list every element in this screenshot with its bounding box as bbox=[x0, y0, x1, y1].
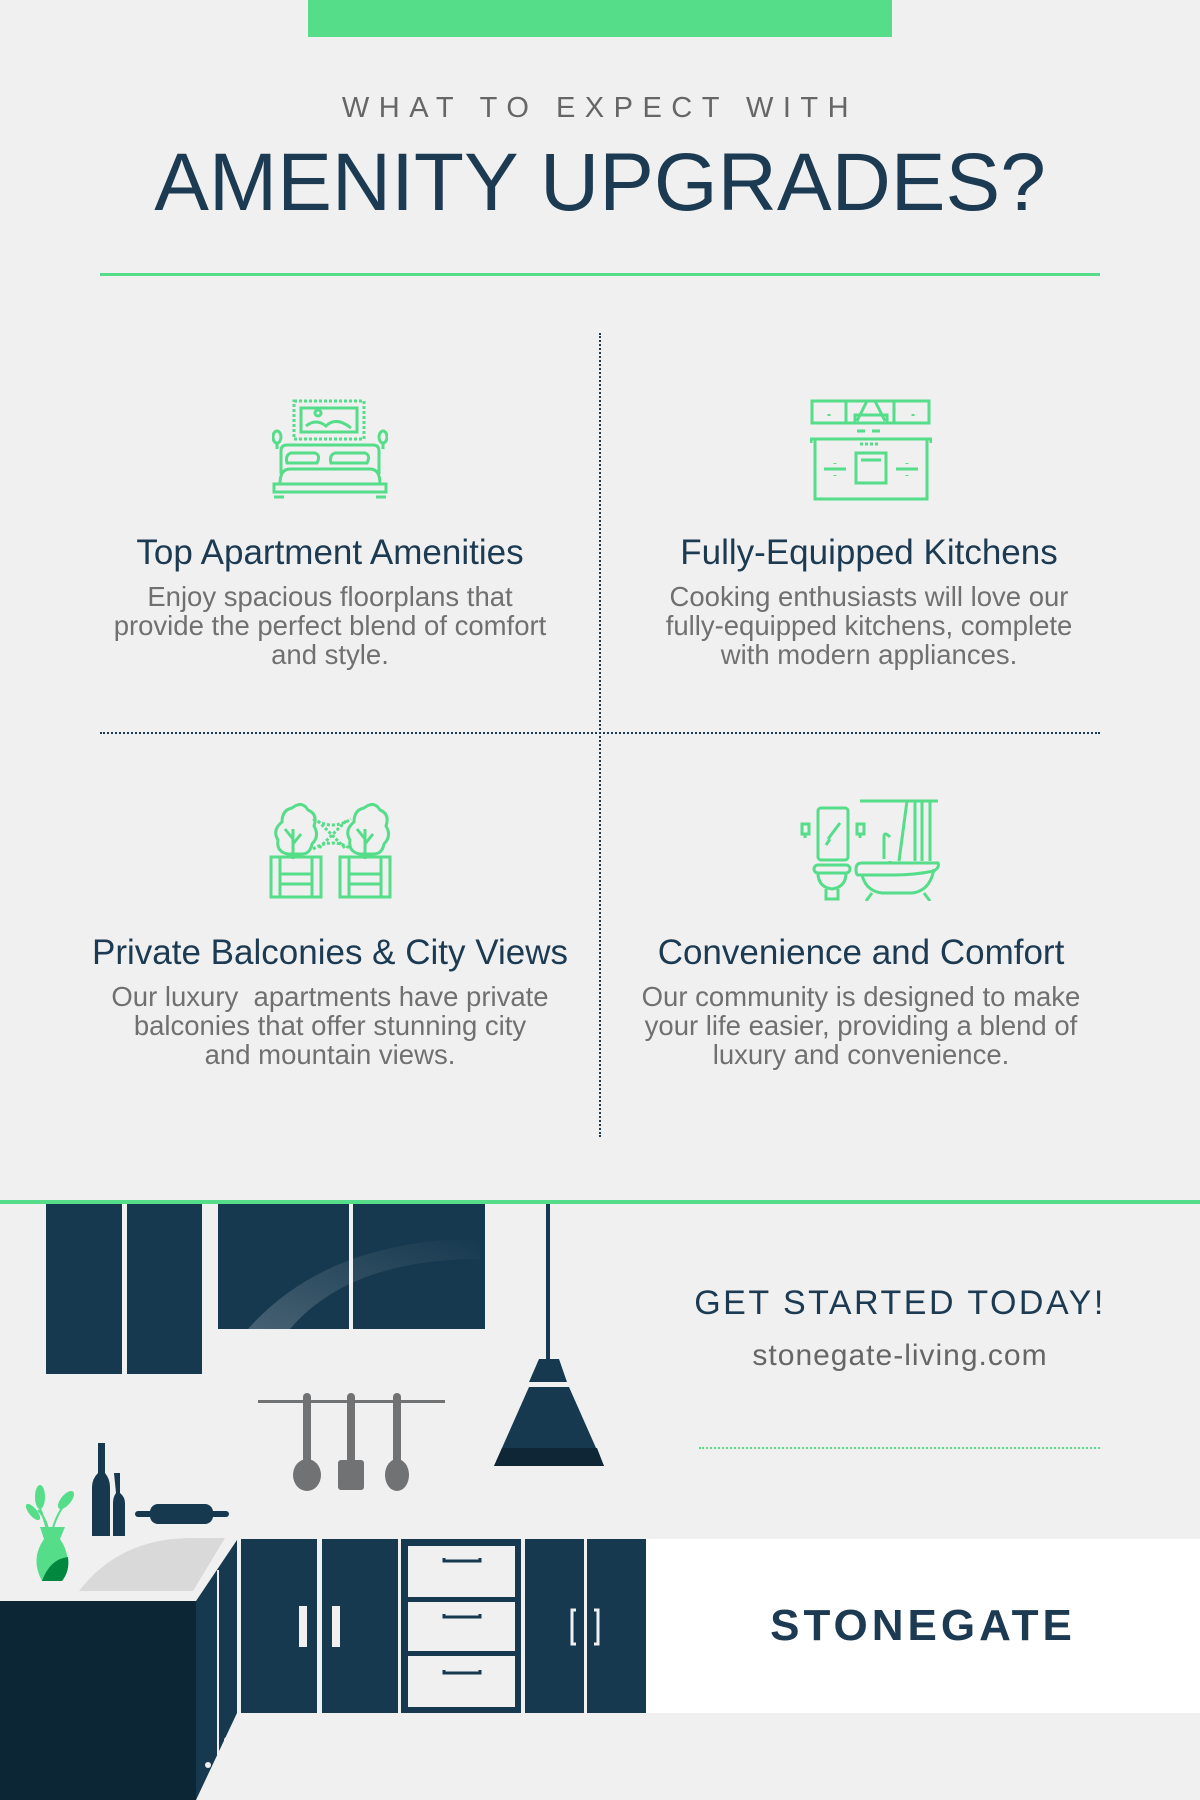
vase plant bbox=[24, 1485, 77, 1581]
window bbox=[218, 1204, 485, 1329]
text bbox=[642, 981, 1080, 1070]
rolling pin bbox=[135, 1504, 229, 1524]
heading: Private Balconies & City Views bbox=[92, 933, 568, 972]
text: Our community is designed to make bbox=[642, 981, 1080, 1012]
icon: bathroom bbox=[800, 800, 940, 901]
green separator line bbox=[0, 1200, 1200, 1204]
panel: private balconies bbox=[92, 803, 568, 1070]
green dotted line bbox=[699, 1447, 1100, 1449]
panel: top apartment amenities bbox=[114, 400, 546, 670]
icon: bed bbox=[272, 400, 388, 498]
text: balconies that offer stunning city bbox=[134, 1010, 526, 1041]
heading: Fully-Equipped Kitchens bbox=[680, 533, 1058, 572]
text: and mountain views. bbox=[205, 1039, 455, 1070]
panel: fully-equipped kitchens bbox=[666, 400, 1072, 670]
panel: convenience and comfort bbox=[642, 800, 1080, 1070]
text: Our luxury apartments have private bbox=[111, 981, 549, 1012]
dark counter block bbox=[0, 1540, 237, 1800]
sink counter bbox=[79, 1538, 225, 1591]
logo band bbox=[646, 1539, 1200, 1713]
divider green bbox=[100, 273, 1100, 276]
logo: STONEGATE bbox=[770, 1601, 1076, 1650]
grid dividers bbox=[599, 333, 601, 1137]
text: provide the perfect blend of comfort bbox=[114, 610, 546, 641]
text: Enjoy spacious floorplans that bbox=[147, 581, 513, 612]
bottles bbox=[92, 1443, 125, 1536]
heading: Convenience and Comfort bbox=[658, 933, 1064, 972]
text: fully-equipped kitchens, complete bbox=[666, 610, 1072, 641]
subtitle: WHAT TO EXPECT WITH bbox=[342, 92, 858, 124]
heading: Top Apartment Amenities bbox=[136, 533, 524, 572]
text bbox=[114, 581, 546, 670]
text: luxury and convenience. bbox=[713, 1039, 1009, 1070]
call to action bbox=[694, 1284, 1106, 1372]
top green bar bbox=[308, 0, 892, 37]
text: Cooking enthusiasts will love our bbox=[670, 581, 1068, 612]
lower cabinets bbox=[241, 1539, 646, 1713]
url: stonegate-living.com bbox=[752, 1339, 1048, 1372]
text bbox=[666, 581, 1072, 670]
pendant lamp bbox=[494, 1204, 604, 1466]
main title: AMENITY UPGRADES? bbox=[154, 137, 1046, 228]
text: with modern appliances. bbox=[721, 639, 1017, 670]
cta heading: GET STARTED TODAY! bbox=[694, 1284, 1106, 1322]
text: and style. bbox=[271, 639, 389, 670]
text bbox=[111, 981, 549, 1070]
upper cabinets bbox=[46, 1204, 202, 1374]
icon: kitchen bbox=[810, 400, 932, 500]
icon: balcony chairs and trees bbox=[270, 803, 392, 898]
utensils rail bbox=[258, 1393, 445, 1491]
text: your life easier, providing a blend of bbox=[645, 1010, 1077, 1041]
